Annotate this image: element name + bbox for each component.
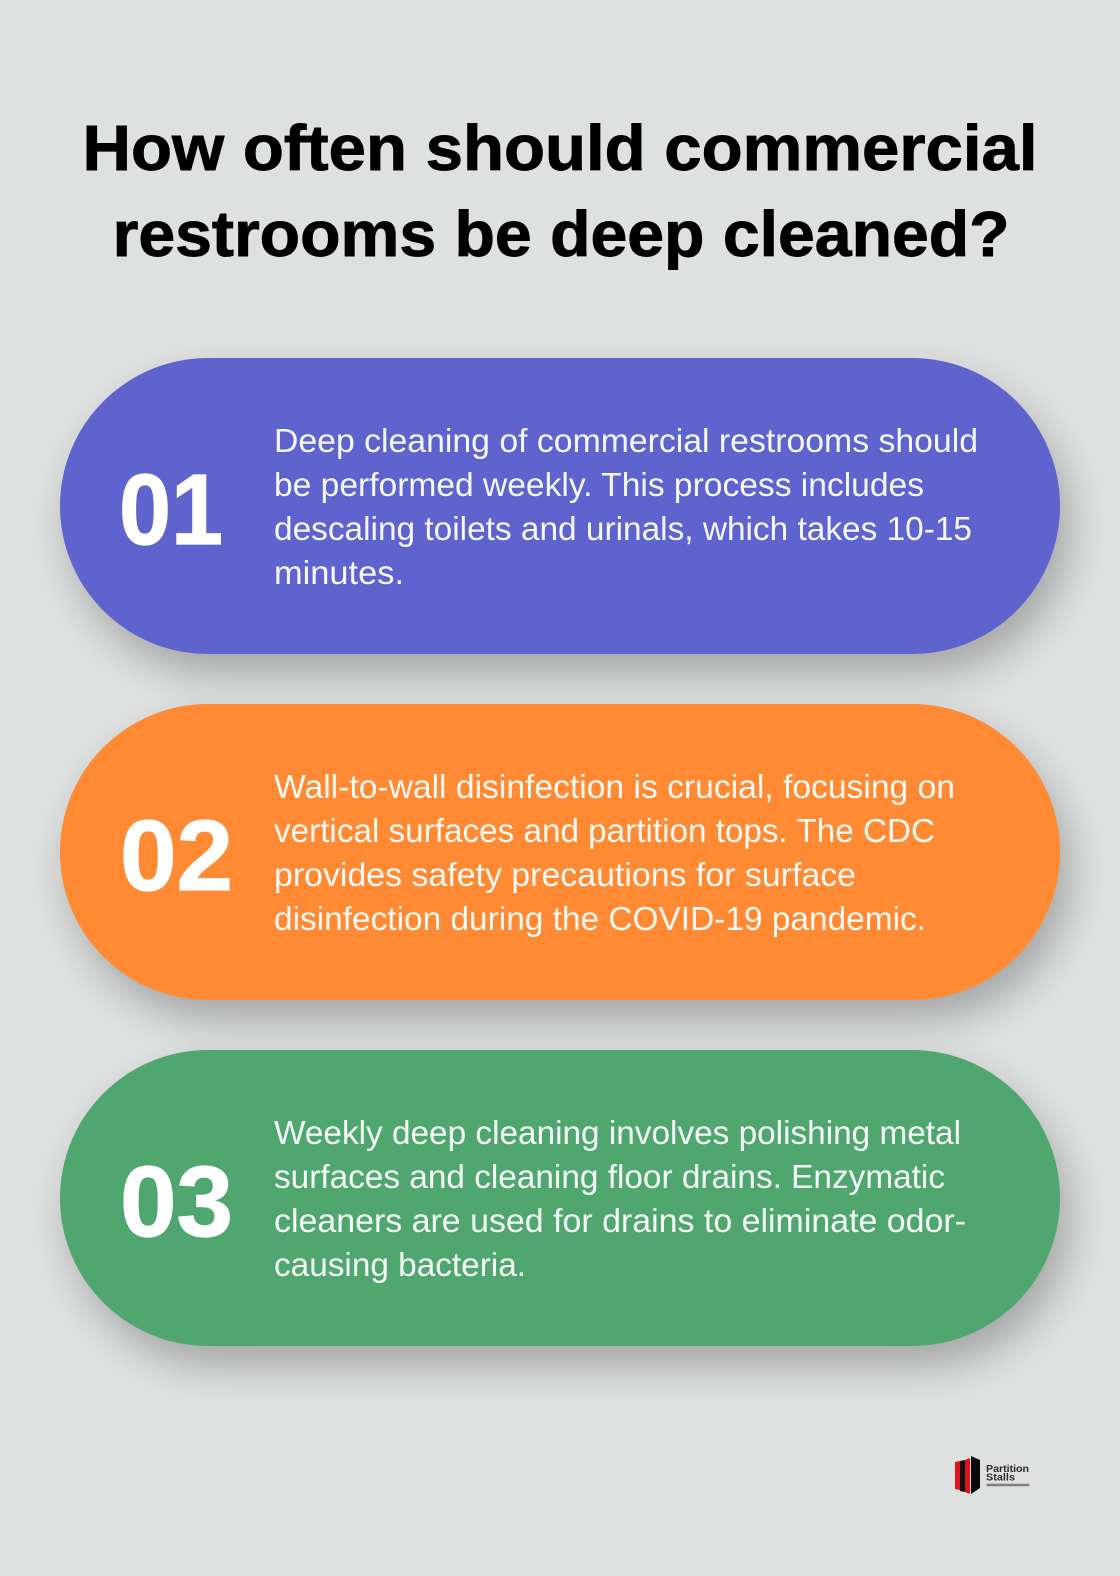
text block: step 03: [274, 1114, 966, 1283]
text block: step 03: surfaces and cleaning floor drains. Enzymatic: [274, 1158, 945, 1195]
text block: step 01: Deep cleaning of commercial restrooms should: [274, 422, 978, 459]
text block: step 01: be performed weekly. This process includes: [274, 466, 924, 503]
logo: Partition Stalls: [955, 1456, 1030, 1494]
text block: step 02: vertical surfaces and partition tops. The CDC: [274, 812, 935, 849]
panel: step 01: [60, 358, 1070, 674]
text block: step 03: Weekly deep cleaning involves polishing metal: [274, 1114, 961, 1151]
text block: step 01: [274, 422, 978, 591]
logo wordmark: Stalls: [986, 1472, 1015, 1484]
icon: partition panels: [955, 1456, 980, 1494]
number 03: 03: [120, 1146, 233, 1258]
title: How often should commercial: [82, 112, 1038, 184]
text block: step 02: Wall-to-wall disinfection is crucial, focusing on: [274, 768, 955, 805]
text block: step 01: minutes.: [274, 554, 404, 591]
pill background: green: [60, 1050, 1060, 1346]
panel: step 03: [60, 1050, 1070, 1366]
title: [82, 112, 1038, 270]
number 02: 02: [120, 800, 233, 912]
pill background: orange: [60, 704, 1060, 1000]
text block: step 03: cleaners are used for drains to eliminate odor-: [274, 1202, 966, 1239]
number 01: 01: [119, 454, 223, 566]
text block: step 02: [274, 768, 955, 937]
text block: step 02: provides safety precautions for surface: [274, 856, 856, 893]
title: restrooms be deep cleaned?: [113, 198, 1010, 270]
text block: step 01: descaling toilets and urinals, which takes 10-15: [274, 510, 972, 547]
panel: step 02: [60, 704, 1070, 1020]
logo wordmark: [986, 1464, 1030, 1487]
pill background: purple: [60, 358, 1060, 654]
logo wordmark: Partition: [986, 1464, 1029, 1475]
text block: step 02: disinfection during the COVID-19 pandemic.: [274, 900, 926, 937]
text block: step 03: causing bacteria.: [274, 1246, 526, 1283]
